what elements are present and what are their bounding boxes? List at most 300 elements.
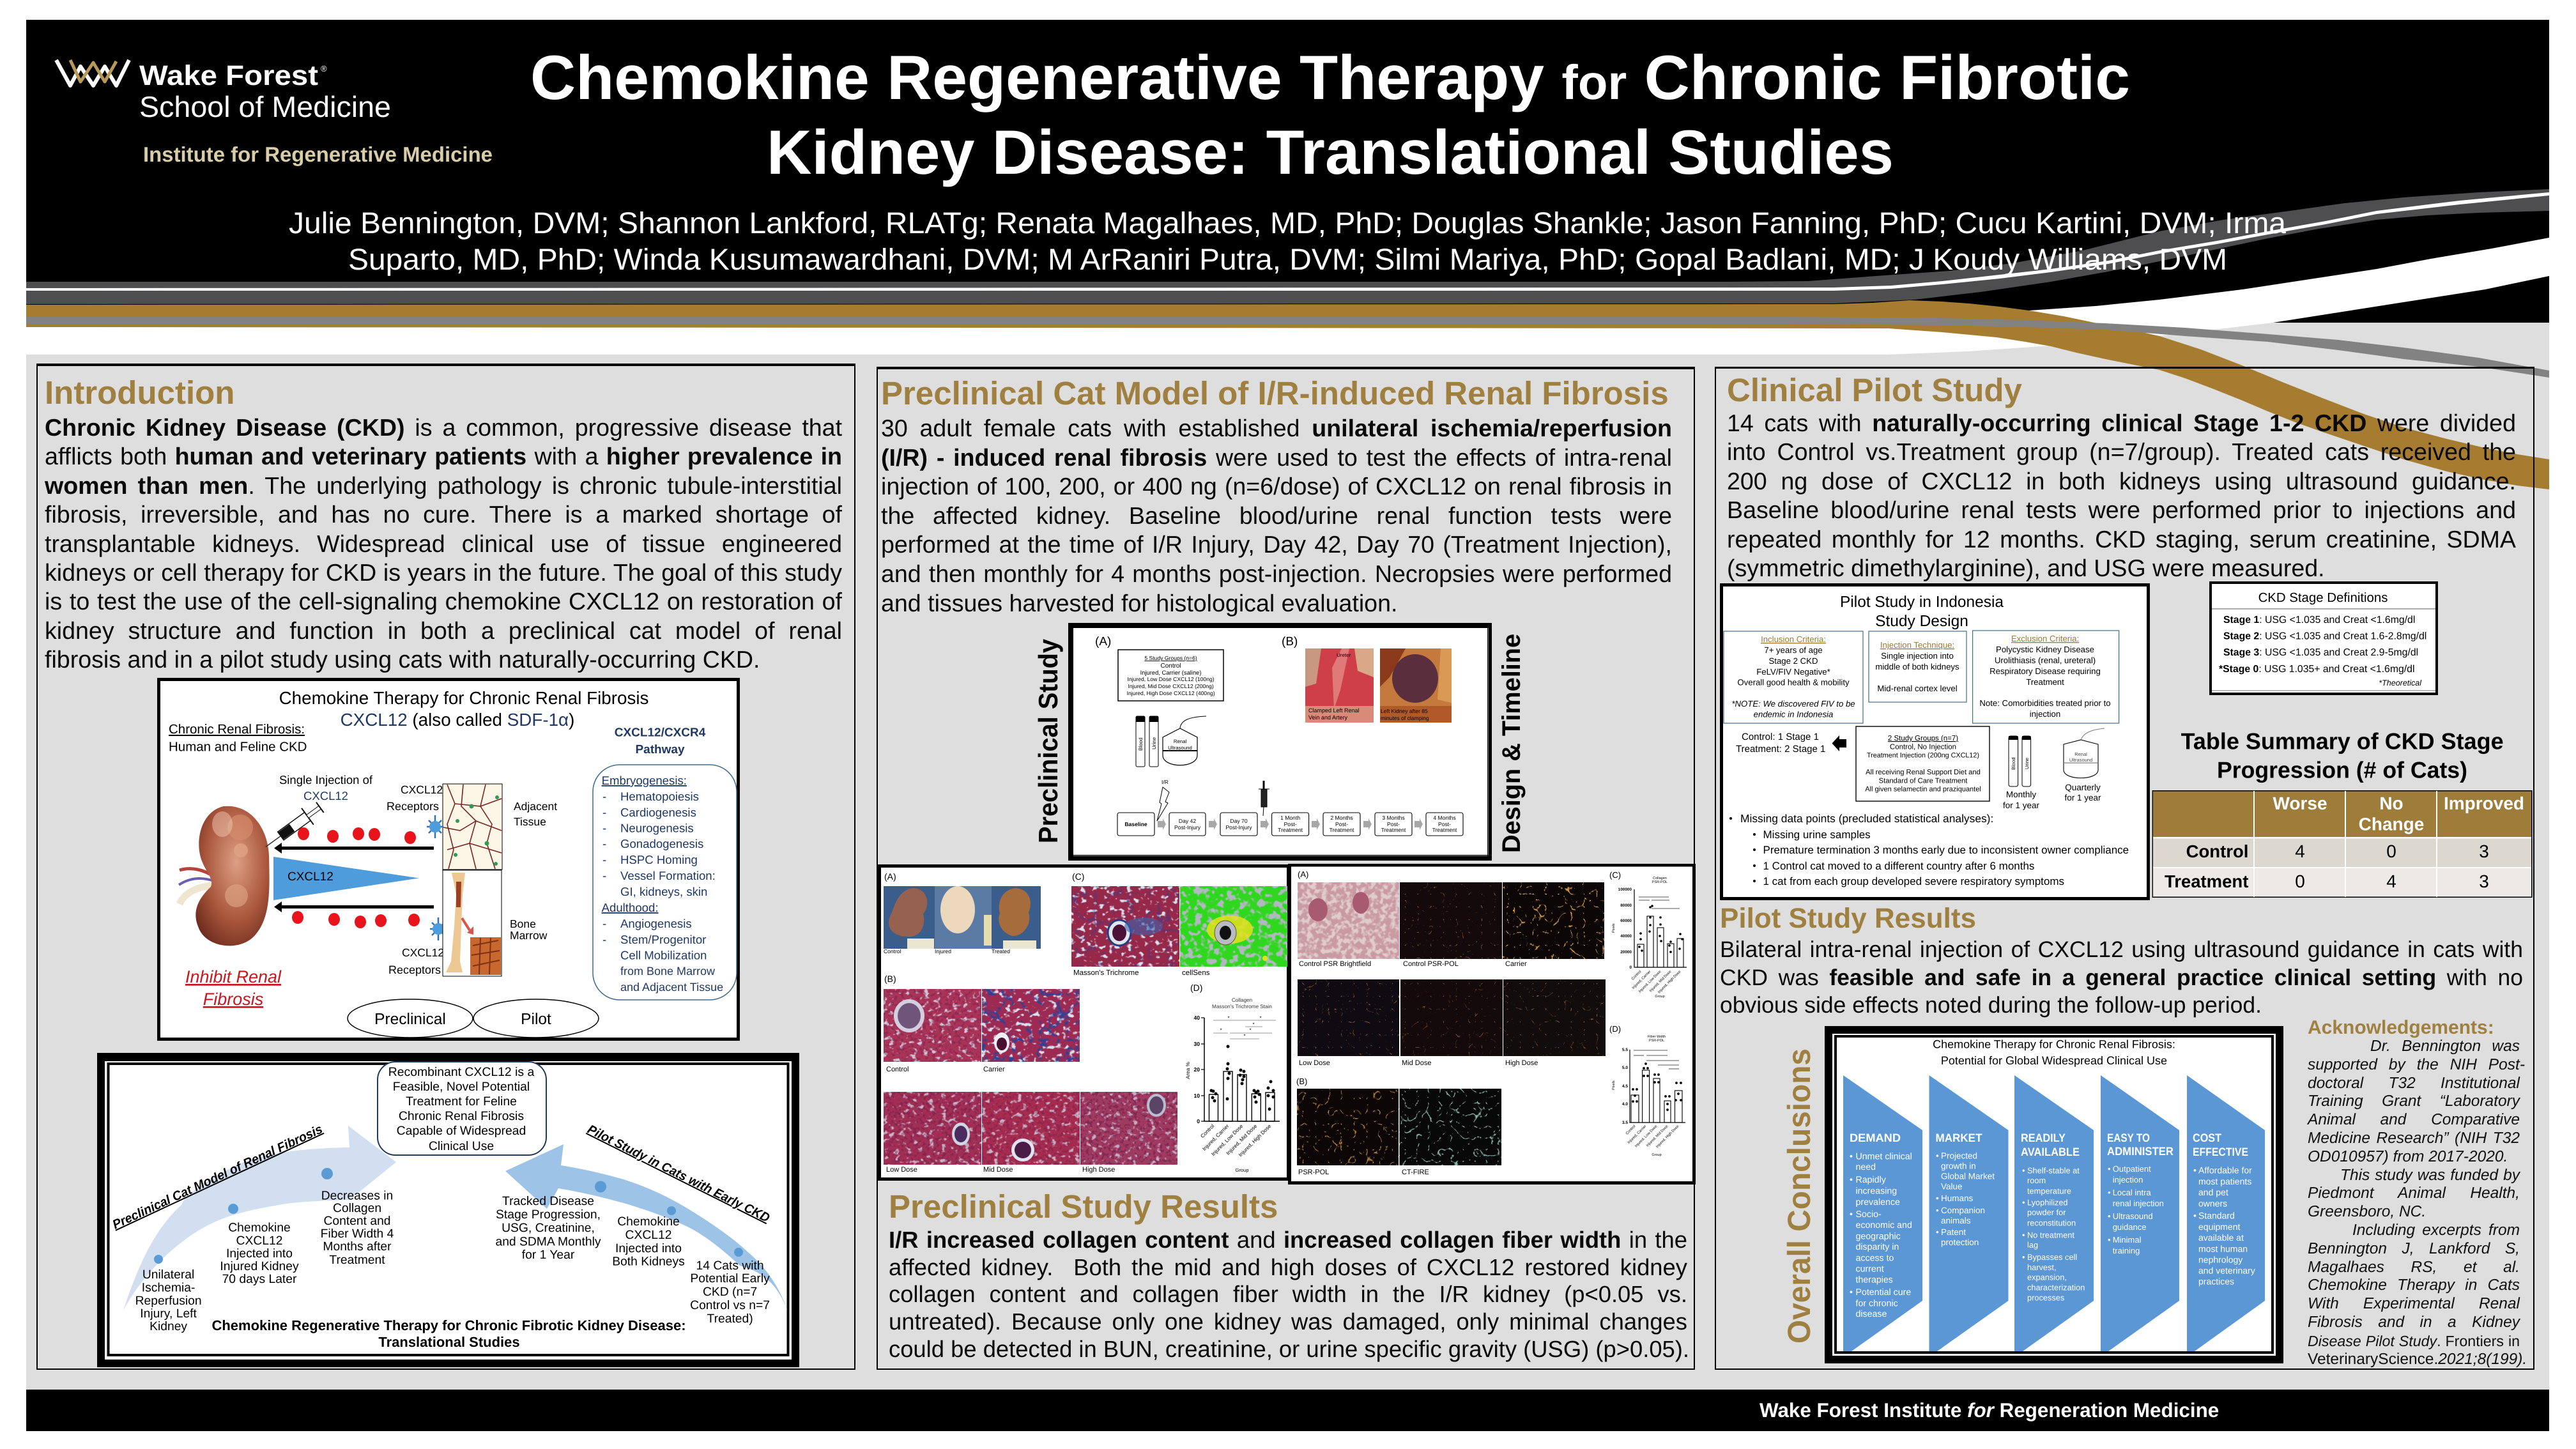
icon: woven W logo mark [56,60,129,86]
timeline: Treatment [1278,827,1303,833]
institute name: Institute for Regenerative Medicine [143,142,493,166]
table values: 3 [2479,841,2489,861]
chart: collagen Masson's trichrome [1185,997,1280,1173]
chart: fiber width PSR-POL: 5.5 [1622,1048,1628,1052]
chart: fiber width PSR-POL: Injured, Carrier [1627,1124,1647,1145]
chart: collagen PSR-POL: 80000 [1620,903,1632,908]
text: preclinical results [889,1227,1689,1362]
steps: pilot: CXCL12 [625,1229,671,1242]
column: demand: • [1850,1175,1853,1185]
steps: preclinical: Ischemia- [142,1282,195,1294]
panel: embryogenesis pathway list: Embryogenesis: [602,774,687,787]
text: introduction: kidney structure and function in both a preclinical cat model of renal [45,617,842,644]
chart: collagen PSR-POL: PSR-POL [1652,880,1667,884]
callout: conclusion box: Clinical Use [429,1139,494,1153]
column: easy to administer: • [2108,1188,2111,1197]
panel letters: (D) [1609,1024,1621,1034]
text: acknowledgements: OD010957) from 2017-2020. [2308,1148,2508,1165]
icon: receptor star lower [430,917,447,940]
column: readily available: • [2022,1197,2025,1208]
timeline: 4 Months [1433,815,1456,821]
title [530,42,2130,187]
ovals: preclinical and pilot: Pilot [521,1011,551,1028]
icons: blood and urine tubes, ultrasound [1136,716,1206,767]
figure caption: Chemokine Regenerative Therapy for Chronic Fibrotic Kidney Disease: [211,1317,686,1333]
text: missing data notes [1729,812,2129,887]
text: acknowledgements: Greensboro, NC. [2308,1203,2426,1220]
steps: preclinical: CXCL12 [236,1234,282,1248]
labels: receptors and tissue: CXCL12 [401,783,443,796]
timeline: Post- [1438,821,1451,827]
chart: collagen PSR-POL: 20000 [1620,950,1632,954]
column: cost effective: EFFECTIVE [2193,1146,2248,1158]
text: introduction: Chronic Kidney Disease (CKD) is a common, progressive disease that [45,414,842,441]
image: PSR-POL [1297,1089,1399,1165]
callout: conclusion box [378,1062,546,1155]
chart: collagen PSR-POL: Group [1655,995,1665,999]
column: readily available: • [2022,1252,2025,1262]
column: easy to administer [2101,1075,2179,1351]
column: readily available: • [2022,1166,2025,1176]
panel: introduction [36,364,855,1370]
column: demand: economic and [1855,1220,1912,1230]
column: cost effective: equipment [2198,1222,2240,1232]
ovals: preclinical and pilot [348,999,599,1038]
labels: dose groups: Mid Dose [983,1166,1013,1174]
labels: receptors and tissue: CXCL12 [402,946,444,959]
column: market: protection [1941,1238,1979,1247]
photos: left kidney after clamping [1380,648,1452,723]
steps: preclinical: Collagen [333,1202,381,1215]
icon: injury bolt [1157,779,1169,821]
figure: chemokine therapy pathway [157,678,740,1041]
column: market: • [1936,1151,1939,1160]
chart: fiber width PSR-POL: Fiber Width [1648,1035,1666,1039]
panel letters: (B) [884,974,896,984]
figure caption: Translational Studies [378,1334,520,1350]
chart: collagen PSR-POL: Injured, Low Dose [1637,969,1662,993]
steps: pilot: CKD (n=7 [703,1285,757,1299]
labels: control and carrier: Carrier [983,1066,1005,1073]
column: readily available: powder for [2027,1208,2066,1217]
image: mid dose PSR-POL [1400,979,1503,1056]
chart: collagen Masson's trichrome: Injured, High Dose [1238,1123,1273,1158]
chart: collagen Masson's trichrome: Group [1235,1167,1249,1173]
table title: Progression (# of Cats) [2217,756,2467,783]
column: demand: DEMAND [1850,1131,1901,1144]
icons: blood and urine tubes, ultrasound: Blood [1138,738,1144,751]
column: readily available: AVAILABLE [2021,1146,2080,1158]
text: missing data notes: Premature termination 3 months early due to inconsistent owner compliance [1763,844,2129,856]
column: easy to administer: EASY TO [2107,1131,2150,1144]
chart: fiber width PSR-POL: Group [1652,1153,1662,1157]
text: acknowledgements: Training Grant “Laboratory [2308,1092,2520,1110]
steps: preclinical: Chemokine [228,1222,291,1234]
column: market: MARKET [1936,1131,1982,1144]
icons: blood and urine tubes, ultrasound: Ultrasound [1168,745,1192,751]
chart: collagen PSR-POL: Injured, High Dose [1657,969,1682,994]
figure title: Pilot Study in Indonesia [1840,594,2004,611]
callout: conclusion box: Treatment for Feline [406,1094,517,1108]
column: readily available: • [2022,1230,2025,1239]
box: injection technique: Mid-renal cortex level [1877,684,1958,693]
figure: histology collagen trichrome [878,864,1288,1181]
panel letters [884,871,1202,993]
icons: blood and urine tubes, ultrasound: Renal [1174,739,1186,744]
table row labels: Control [2186,841,2248,861]
chart: collagen PSR-POL: 40000 [1620,934,1632,939]
definitions list [2219,615,2426,687]
column: readily available: Shelf-stable at [2027,1166,2080,1176]
steps: preclinical: Reperfusion [135,1294,202,1308]
timeline: 3 Months [1382,815,1405,821]
arrow: pilot [505,1144,788,1311]
image: high dose PSR-POL [1503,979,1606,1056]
image: CT-FIRE [1399,1089,1501,1165]
authors: Julie Bennington, DVM; Shannon Lankford, RLATg; Renata Magalhaes, MD, PhD; Douglas Shankle; Jason Fanning, PhD; Cucu Kartini, DVM; Irma [289,206,2287,240]
callout: conclusion box: Recombinant CXCL12 is a [388,1065,534,1079]
text: introduction: transplantable kidneys. Widespread clinical use of tissue engineered [45,530,842,557]
table values: 0 [2386,841,2396,861]
callout: inhibit renal fibrosis: Fibrosis [203,990,263,1009]
icon: receptor star upper [427,815,443,838]
column: easy to administer: • [2108,1164,2111,1174]
column: readily available: temperature [2027,1186,2071,1196]
text: introduction: women than men. The underlying pathology is chronic tubule-interstitial [45,472,842,499]
text: missing data notes: Missing data points (precluded statistical analyses): [1740,812,1993,825]
study groups box: Injured, Mid Dose CXCL12 (200ng) [1128,683,1214,689]
text: missing data notes: 1 cat from each group developed severe respiratory symptoms [1763,875,2064,887]
figure title [1840,594,2004,630]
chart: collagen PSR-POL [1612,877,1687,999]
labels: dose groups: Low Dose [886,1166,917,1174]
column: cost effective: owners [2198,1199,2227,1209]
wedge label: CXCL12 [288,870,334,884]
kidney photo labels [884,948,1010,954]
column: readily available: Lyophilized [2027,1197,2068,1208]
label: chronic renal fibrosis: Human and Feline CKD [169,740,307,754]
text: preclinical results: untreated). Because only one kidney was damaged, only minimal changes [889,1308,1687,1335]
chart: fiber width PSR-POL: 5.0 [1622,1066,1628,1070]
column: demand: disease [1855,1309,1887,1319]
labels: dose groups [886,1166,1115,1174]
text: acknowledgements: supported by the NIH Post- [2308,1056,2525,1073]
icons: blood and urine tubes: Blood [2011,758,2016,770]
column: market: growth in [1941,1162,1976,1171]
table: CKD stage progression [2151,789,2533,899]
chart: fiber width PSR-POL: 4.5 [1622,1084,1628,1089]
column: demand: Unmet clinical [1855,1151,1912,1162]
kidney photo labels: Treated [992,948,1010,954]
photos: left kidney after clamping: minutes of clamping [1381,715,1429,721]
panel: embryogenesis pathway list: Stem/Progenitor [620,933,706,946]
timeline: Treatment [1381,827,1406,833]
table title: Table Summary of CKD Stage [2181,728,2504,755]
panel: embryogenesis pathway list: - [602,853,606,866]
image: Masson's trichrome [1071,886,1179,967]
chart: collagen Masson's trichrome: 30 [1193,1041,1200,1047]
text: acknowledgements: Magalhaes RS, et al. [2308,1259,2520,1276]
labels: receptors and tissue: Marrow [510,929,548,942]
text: preclinical results: I/R increased collagen content and increased collagen fiber width in the [889,1227,1687,1253]
text: acknowledgements: Bennington J, Lankford S, [2308,1240,2520,1257]
definitions list: Stage 3: USG <1.035 and Creat 2.9-5mg/dl [2223,647,2418,658]
text: stage 1 cats: Control: 1 Stage 1 [1742,732,1819,742]
table values [2295,841,2489,891]
column: easy to administer: renal injection [2113,1199,2164,1208]
text: acknowledgements: doctoral T32 Institutional [2308,1075,2520,1092]
heading: preclinical model: Preclinical Cat Model of I/R-induced Renal Fibrosis [881,375,1669,411]
box: exclusion criteria: Urolithiasis (renal, ureteral) [1995,656,2096,665]
text: introduction [45,414,842,673]
photos: renal clamp surgery: Ureter [1337,652,1351,658]
text: pilot results: Bilateral intra-renal injection of CXCL12 using ultrasound guidance in cats with [1720,937,2523,962]
column: market: animals [1941,1216,1971,1225]
icon: ultrasound: Quarterly [2065,783,2101,792]
steps: preclinical: Injury, Left [140,1307,197,1321]
box: inclusion criteria: FeLV/FIV Negative* [1756,667,1830,677]
title: Chemokine Regenerative Therapy for Chronic Fibrotic [530,42,2130,112]
chart: collagen PSR-POL: Collagen [1653,877,1667,880]
chart: fiber width PSR-POL: Injured, Mid Dose [1645,1124,1669,1148]
column: cost effective: COST [2193,1131,2221,1144]
steps: preclinical: 70 days Later [222,1273,297,1286]
steps: preclinical [135,1190,394,1333]
chart: collagen Masson's trichrome: 0 [1197,1118,1200,1124]
logo: Wake Forest School of Medicine [54,59,493,166]
chart: fiber width PSR-POL: 4.0 [1622,1102,1628,1107]
panel: embryogenesis pathway list: from Bone Marrow [620,965,716,977]
panel: embryogenesis pathway list: - [602,806,606,819]
icon: injury bolt: I/R [1162,779,1169,785]
study groups box [1118,650,1223,701]
panel: embryogenesis pathway list: HSPC Homing [620,853,698,866]
text: acknowledgements: Animal and Comparative [2308,1111,2520,1128]
text: missing data notes: 1 Control cat moved to a different country after 6 months [1763,860,2034,872]
panel: embryogenesis pathway list: - [602,790,606,803]
chart: collagen Masson's trichrome: * [1227,1015,1230,1021]
text: acknowledgements: Including excerpts from [2352,1222,2520,1239]
chart: collagen PSR-POL: 60000 [1620,919,1632,923]
photos: renal clamp surgery: Clamped Left Renal [1308,707,1360,714]
labels: stain images [1073,969,1210,977]
labels: row three: PSR-POL [1298,1169,1329,1176]
steps: pilot: USG, Creatinine, [502,1222,595,1235]
text: clinical pilot: Baseline blood/urine renal tests were performed prior to injections and [1727,496,2516,523]
column: cost effective: Affordable for [2198,1165,2252,1176]
labels: row three: CT-FIRE [1402,1169,1429,1176]
chart: collagen Masson's trichrome: * [1243,1033,1246,1039]
definitions list: Stage 1: USG <1.035 and Creat <1.6mg/dl [2223,615,2415,625]
icon: ultrasound: Ultrasound [2069,757,2092,763]
box: inclusion criteria: Inclusion Criteria: [1761,634,1826,644]
steps: preclinical: Content and [323,1215,391,1228]
table row labels: Treatment [2165,871,2248,891]
panel letters: (D) [1190,983,1202,993]
figure: study design and timeline [1068,623,1492,861]
labels: row one: Control PSR Brightfield [1299,960,1371,968]
labels: row two: Low Dose [1299,1059,1330,1067]
panel: clinical pilot [1715,367,2534,1370]
box: inclusion criteria: endemic in Indonesia [1754,710,1833,719]
box: exclusion criteria [1973,631,2119,723]
steps: pilot [495,1195,770,1326]
table values: 4 [2295,841,2305,861]
icon: ultrasound: for 1 year [2064,793,2101,802]
label: pilot arm: Pilot Study in Cats with Early CKD [585,1123,772,1225]
panel: embryogenesis pathway list: and Adjacent Tissue [620,981,723,993]
text: acknowledgements: VeterinaryScience.2021;8(199). [2308,1351,2527,1368]
panel: embryogenesis pathway list: Vessel Formation: [620,869,716,882]
text: preclinical model: the affected kidney. Baseline blood/urine renal function tests were [881,502,1672,529]
label: chronic renal fibrosis: Chronic Renal Fibrosis: [169,722,305,737]
text: introduction: afflicts both human and veterinary patients with a higher prevalence in [45,443,842,470]
chart: collagen Masson's trichrome: * [1252,1022,1255,1027]
panel letters: (B) [1296,1077,1307,1086]
chart: collagen Masson's trichrome: * [1220,1027,1222,1033]
column: readily available: No treatment [2027,1230,2074,1239]
column: easy to administer: Ultrasound [2113,1211,2153,1221]
chart: collagen Masson's trichrome: Collagen [1232,997,1253,1003]
panel: embryogenesis pathway list: Cell Mobilization [620,949,707,962]
figure title: Potential for Global Widespread Clinical Use [1941,1054,2167,1067]
heading: introduction: Introduction [45,374,234,411]
image: low dose tissue [884,1092,981,1165]
chart: collagen Masson's trichrome: Injured, Mid Dose [1225,1123,1259,1156]
icons: blood and urine tubes: Monthly [2006,790,2036,799]
label: single injection: Single Injection of [279,773,373,786]
box: inclusion criteria: Stage 2 CKD [1769,656,1818,666]
column: cost effective: and veterinary [2198,1266,2255,1276]
labels: dose groups: High Dose [1082,1166,1115,1174]
box: study groups: All given selamectin and praziquantel [1865,786,1981,793]
panel: embryogenesis pathway list [593,726,737,1000]
timeline: Post- [1335,821,1348,827]
box: exclusion criteria: Treatment [2026,677,2064,687]
steps: preclinical: Injected into [226,1247,293,1261]
column: easy to administer: • [2108,1211,2111,1221]
text: clinical pilot: (symmetric dimethylarginine), and USG were measured. [1727,555,2325,581]
text: acknowledgements: With Experimental Renal [2308,1295,2520,1312]
column: demand: Rapidly [1855,1175,1887,1185]
image: control PSR-POL [1400,882,1502,959]
logo wordmark: ® [321,64,327,73]
figure: CKD stage definitions [2209,581,2438,695]
labels: control and carrier: Control [886,1066,908,1073]
labels: row two [1299,1059,1538,1067]
heading: preclinical results: Preclinical Study Results [889,1188,1278,1225]
chart: collagen Masson's trichrome: 40 [1193,1015,1200,1021]
column: cost effective: Standard [2198,1210,2235,1220]
rotated label: design and timeline: Design & Timeline [1498,634,1526,853]
column: market: Value [1941,1182,1963,1192]
logo wordmark: School of Medicine [139,90,391,123]
column: demand: need [1855,1162,1876,1172]
kidney photo labels: Injured [935,948,951,954]
icon: kidney [179,806,270,946]
panel: embryogenesis pathway list: Angiogenesis [620,917,692,930]
text: preclinical model: injection of 100, 200, or 400 ng (n=6/dose) of CXCL12 on renal fibrosis in [881,473,1672,500]
study groups box: 5 Study Groups (n=6) [1144,655,1197,661]
image: high dose tissue [1080,1092,1177,1165]
column: readily available: lag [2027,1240,2038,1250]
box: study groups: 2 Study Groups (n=7) [1888,735,1958,742]
panel: embryogenesis pathway list: Pathway [635,743,685,756]
column: market [1929,1075,2009,1351]
text: acknowledgements: Fibrosis and in a Kidney [2308,1314,2520,1331]
definitions list: *Theoretical [2379,678,2422,687]
study groups box: Injured, Low Dose CXCL12 (100ng) [1128,676,1215,682]
kidney photo labels: Control [884,948,901,954]
box: exclusion criteria: Polycystic Kidney Disease [1996,645,2094,654]
timeline: Day 42 [1179,818,1196,824]
box: injection technique: Injection Technique: [1880,640,1954,650]
text: pilot results [1720,936,2523,1020]
column: market: • [1936,1206,1939,1215]
table title [2172,725,2511,786]
table header: Improved [2444,793,2524,813]
authors: Suparto, MD, PhD; Winda Kusumawardhani, DVM; M ArRaniri Putra, DVM; Silmi Mariya, PhD; Gopal Badlani, MD; J Koudy Williams, DVM [348,242,2227,276]
chart: collagen Masson's trichrome: Area % [1185,1062,1191,1079]
table header: No [2379,793,2404,813]
ovals: preclinical and pilot: Preclinical [374,1011,446,1028]
column: cost effective: • [2193,1210,2196,1220]
timeline: Baseline [1124,821,1147,827]
figure title [1933,1038,2175,1067]
label: preclinical arm: Preclinical Cat Model of Renal Fibrosis [111,1122,325,1232]
box: exclusion criteria: Note: Comorbidities treated prior to [1979,698,2111,708]
authors [289,206,2287,276]
table values: 4 [2386,871,2396,891]
box: inclusion criteria: Overall good health & mobility [1737,678,1850,687]
column: easy to administer: Local intra [2113,1188,2151,1197]
labels: row three [1298,1169,1429,1176]
definitions list: Stage 2: USG <1.035 and Creat 1.6-2.8mg/dl [2223,631,2426,641]
column: easy to administer: Minimal [2113,1235,2142,1245]
photos: renal clamp surgery: Vein and Artery [1308,714,1348,721]
labels: receptors and tissue [387,783,557,976]
timeline: Post- [1387,821,1400,827]
labels: row one [1299,960,1527,968]
panel labels [1095,635,1298,648]
box: study groups: Control, No Injection [1890,744,1956,751]
labels: row two: Mid Dose [1402,1059,1431,1067]
steps: preclinical: Fiber Width 4 [321,1227,394,1241]
timeline: Post- [1284,821,1297,827]
text: preclinical model [881,415,1672,617]
chart: collagen Masson's trichrome: Control [1199,1123,1216,1139]
bone and marrow image [443,870,502,976]
definitions title: CKD Stage Definitions [2258,591,2388,605]
text: preclinical model: and tissues harvested for histological evaluation. [881,590,1397,617]
study groups box: Control [1160,663,1181,670]
panel: embryogenesis pathway list: - [602,869,606,882]
box: study groups: Treatment Injection (200ng CXCL12) [1867,752,1979,760]
timeline: 2 Months [1330,815,1353,821]
callout: inhibit renal fibrosis [185,967,282,1009]
figure title: Chemokine Therapy for Chronic Renal Fibrosis: [1933,1038,2175,1051]
text: pilot results: CKD was feasible and safe in a general practice clinical setting with no [1720,965,2523,990]
labels: receptors and tissue: Receptors [387,800,439,813]
panel: embryogenesis pathway list: - [602,837,606,850]
column: demand: Potential cure [1855,1287,1911,1298]
labels: control and carrier [886,1066,1005,1073]
text: acknowledgements: Dr. Bennington was [2370,1038,2520,1055]
column: market: • [1936,1193,1939,1203]
timeline: Day 70 [1230,818,1248,824]
text: preclinical model: 30 adult female cats with established unilateral ischemia/reperfusion [881,415,1672,441]
icons: blood and urine tubes, ultrasound: Urine [1151,737,1157,749]
